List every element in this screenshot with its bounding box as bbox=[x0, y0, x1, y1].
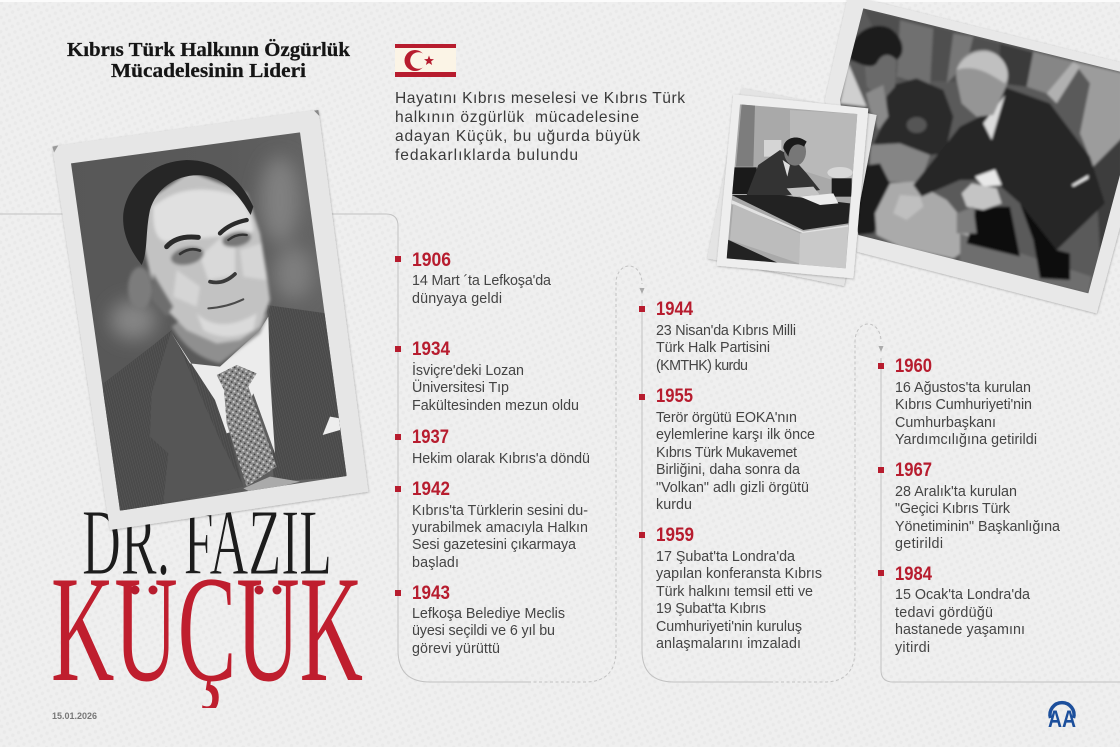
entry: 1942: Sesi gazetesini çıkarmaya bbox=[412, 537, 576, 553]
entry: 1959: yapılan konferansta Kıbrıs bbox=[656, 566, 822, 582]
entry: 1955: kurdu bbox=[656, 497, 692, 513]
entry: 1960: Cumhurbaşkanı bbox=[895, 415, 996, 431]
entry: 1984: yitirdi bbox=[895, 640, 930, 656]
entry: 1942: 1942 bbox=[412, 479, 450, 500]
entry: 1943: 1943 bbox=[412, 583, 450, 604]
timeline column 3 bbox=[878, 356, 1060, 656]
entry: 1955: Birliğini, daha sonra da bbox=[656, 462, 800, 478]
name: Dr. Fazıl: DR. FAZIL bbox=[82, 491, 332, 595]
entry: 1967: 1967 bbox=[895, 460, 932, 481]
entry: 1934: İsviçre'deki Lozan bbox=[412, 361, 524, 379]
entry: 1955: 1955 bbox=[656, 386, 693, 407]
name: Küçük: KÜÇÜK bbox=[51, 545, 363, 713]
entry: 1906: dünyaya geldi bbox=[412, 291, 502, 307]
entry: 1934: Üniversitesi Tıp bbox=[412, 378, 509, 396]
entry: 1984: hastanede yaşamını bbox=[895, 622, 1025, 638]
intro text: adayan Küçük, bu uğurda büyük bbox=[395, 128, 640, 145]
date: 15.01.2026 bbox=[52, 711, 97, 721]
entry: 1942: başladı bbox=[412, 555, 459, 571]
entry: 1944: 1944 bbox=[656, 299, 693, 320]
entry: 1906 bbox=[395, 250, 551, 307]
entry: 1960: 1960 bbox=[895, 356, 932, 377]
face shading bbox=[128, 172, 270, 363]
entry: 1942: yurabilmek amacıyla Halkın bbox=[412, 520, 588, 536]
entry: 1955: Kıbrıs Türk Mukavemet bbox=[656, 445, 797, 461]
entry: 1967: 28 Aralık'ta kurulan bbox=[895, 484, 1017, 500]
entry: 1942 bbox=[395, 479, 588, 571]
entry: 1944: (KMTHK) kurdu bbox=[656, 358, 748, 374]
entry: 1959: 17 Şubat'ta Londra'da bbox=[656, 549, 795, 565]
entry: 1934: Fakültesinden mezun oldu bbox=[412, 398, 579, 414]
title: Mücadelesinin Lideri bbox=[111, 60, 306, 82]
entry: 1960: Kıbrıs Cumhuriyeti'nin bbox=[895, 397, 1032, 413]
entry: 1942: Kıbrıs'ta Türklerin sesini du- bbox=[412, 503, 588, 519]
entry: 1937: Hekim olarak Kıbrıs'a döndü bbox=[412, 451, 590, 467]
title bbox=[67, 38, 351, 82]
entry: 1959 bbox=[639, 525, 822, 652]
entry: 1937 bbox=[395, 427, 590, 467]
icon: AA logo: AA bbox=[1048, 706, 1076, 733]
entry: 1943: Lefkoşa Belediye Meclis bbox=[412, 606, 565, 622]
entry: 1967: Yönetiminin" Başkanlığına bbox=[895, 519, 1060, 535]
icon: TRNC flag bbox=[395, 44, 456, 77]
timeline connector bbox=[0, 214, 1120, 682]
timeline column 1 bbox=[395, 250, 590, 657]
entry: 1960: Yardımcılığına getirildi bbox=[895, 432, 1037, 448]
entry: 1906: 14 Mart ´ta Lefkoşa'da bbox=[412, 273, 551, 289]
entry: 1960: 16 Ağustos'ta kurulan bbox=[895, 380, 1031, 396]
entry: 1943: görevi yürüttü bbox=[412, 641, 500, 657]
entry: 1955: Terör örgütü EOKA'nın bbox=[656, 410, 797, 426]
entry: 1944: 23 Nisan'da Kıbrıs Milli bbox=[656, 323, 796, 339]
entry: 1984: 15 Ocak'ta Londra'da bbox=[895, 587, 1030, 603]
entry: 1967: "Geçici Kıbrıs Türk bbox=[895, 501, 1011, 517]
intro text: Hayatını Kıbrıs meselesi ve Kıbrıs Türk bbox=[395, 90, 685, 107]
entry: 1955: "Volkan" adlı gizli örgütü bbox=[656, 480, 809, 496]
intro text: fedakarlıklarda bulundu bbox=[395, 147, 578, 164]
timeline column 2 bbox=[639, 299, 822, 652]
intro text: halkının özgürlük mücadelesine bbox=[395, 109, 639, 126]
photo: field visit bbox=[825, 0, 1120, 313]
entry: 1960 bbox=[878, 356, 1037, 448]
entry: 1944 bbox=[639, 299, 796, 374]
entry: 1955 bbox=[639, 386, 815, 513]
entry: 1934 bbox=[395, 339, 579, 414]
entry: 1943 bbox=[395, 583, 565, 657]
entry: 1944: Türk Halk Partisini bbox=[656, 340, 770, 356]
name: Küçük bbox=[54, 579, 362, 708]
entry: 1959: 19 Şubat'ta Kıbrıs bbox=[656, 601, 766, 617]
entry: 1906: 1906 bbox=[412, 250, 451, 271]
entry: 1984: tedavi gördüğü bbox=[895, 605, 993, 621]
entry: 1937: 1937 bbox=[412, 427, 449, 448]
photo: desk portrait bbox=[707, 88, 877, 286]
entry: 1967 bbox=[878, 460, 1060, 552]
photo: portrait of Dr. Fazıl Küçük bbox=[52, 110, 368, 530]
entry: 1967: getirildi bbox=[895, 536, 943, 552]
entry: 1959: Türk halkını temsil etti ve bbox=[656, 584, 813, 600]
title: Kıbrıs Türk Halkının Özgürlük bbox=[67, 38, 351, 61]
entry: 1959: 1959 bbox=[656, 525, 694, 546]
entry: 1955: eylemlerine karşı ilk önce bbox=[656, 427, 815, 443]
intro text bbox=[395, 90, 685, 164]
entry: 1943: üyesi seçildi ve 6 yıl bu bbox=[412, 623, 555, 639]
photo: desk portrait and field visit bbox=[707, 0, 1120, 313]
entry: 1984: 1984 bbox=[895, 564, 932, 585]
entry: 1959: Cumhuriyeti'nin kuruluş bbox=[656, 619, 802, 635]
entry: 1934: 1934 bbox=[412, 339, 450, 360]
entry: 1959: anlaşmalarını imzaladı bbox=[656, 636, 801, 652]
entry: 1984 bbox=[878, 564, 1030, 656]
